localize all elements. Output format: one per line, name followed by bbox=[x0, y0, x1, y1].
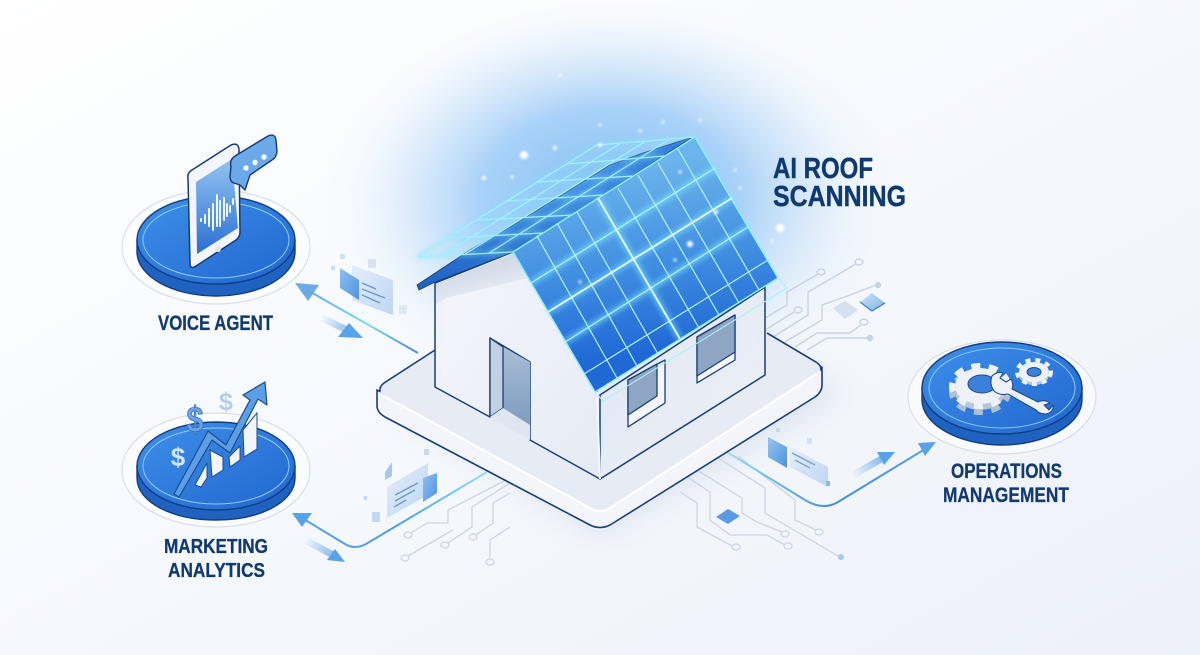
house: door recess bbox=[490, 338, 530, 440]
window: front bbox=[628, 360, 665, 427]
data card: operations management bbox=[768, 428, 830, 487]
data card: voice agent bbox=[331, 254, 407, 315]
house platform bbox=[377, 333, 822, 528]
operations: label: OPERATIONS bbox=[951, 460, 1062, 483]
roof: panel grid bbox=[531, 149, 768, 378]
roof: scanned panel bbox=[513, 137, 778, 392]
operations: platform disc bbox=[908, 340, 1096, 454]
house bbox=[435, 252, 765, 479]
window: rear bbox=[697, 315, 735, 383]
operations: label: MANAGEMENT bbox=[943, 484, 1069, 507]
marketing: dollar signs: $ bbox=[186, 399, 204, 440]
circuit chip: lower right bbox=[716, 509, 740, 524]
roof: overlay frame bbox=[595, 278, 787, 401]
marketing: label: ANALYTICS bbox=[168, 560, 265, 582]
panel: voice agent bbox=[122, 135, 310, 335]
operations: small gear bbox=[1017, 360, 1051, 385]
marketing: bars bbox=[195, 413, 257, 487]
circuit traces: upper right bbox=[765, 259, 880, 350]
marketing: dollar signs bbox=[171, 388, 233, 472]
house: eave shadow bbox=[436, 254, 528, 305]
title: AI Roof Scanning bbox=[773, 153, 906, 213]
roof: sparkle particles bbox=[482, 74, 784, 284]
roof: blurred grid glow bbox=[531, 168, 748, 342]
roof: ghost scanning grid bbox=[417, 137, 695, 257]
panel: marketing analytics bbox=[122, 382, 310, 582]
connector: voice agent bbox=[295, 283, 418, 353]
roof: bright scan lines bbox=[548, 198, 732, 339]
voice agent: platform disc bbox=[122, 190, 310, 304]
marketing: dollar signs: $ bbox=[171, 442, 186, 472]
operations: large gear bbox=[952, 366, 1008, 412]
marketing: label bbox=[164, 536, 268, 582]
marketing: dollar signs: $ bbox=[219, 388, 233, 416]
marketing: label: MARKETING bbox=[164, 536, 268, 558]
voice agent: label: VOICE AGENT bbox=[158, 312, 273, 335]
platform shadow bbox=[400, 340, 840, 535]
roof bbox=[417, 74, 787, 401]
marketing: platform disc bbox=[122, 413, 310, 527]
house: right wall bbox=[600, 287, 765, 479]
circuit traces: lower right bbox=[680, 456, 844, 560]
title: AI Roof Scanning: SCANNING bbox=[773, 181, 906, 213]
data card: marketing analytics bbox=[364, 449, 437, 522]
operations: wrench bbox=[991, 372, 1053, 414]
circuit chips: upper right bbox=[833, 293, 885, 319]
voice agent: phone bbox=[188, 144, 240, 267]
circuit traces: lower left bbox=[401, 478, 510, 565]
marketing: growth arrow bbox=[174, 382, 267, 497]
house: left gable wall bbox=[435, 252, 600, 479]
roof: back slope bbox=[417, 137, 693, 290]
house: corner highlight bbox=[597, 392, 600, 479]
operations: label bbox=[943, 460, 1069, 507]
panel: operations management bbox=[908, 340, 1096, 507]
roof: ghost grid glow bbox=[417, 137, 695, 257]
title: AI Roof Scanning: AI ROOF bbox=[773, 153, 873, 185]
connector: marketing analytics bbox=[292, 472, 487, 562]
voice agent: speech bubble bbox=[230, 135, 277, 190]
connector: operations management bbox=[727, 442, 936, 506]
